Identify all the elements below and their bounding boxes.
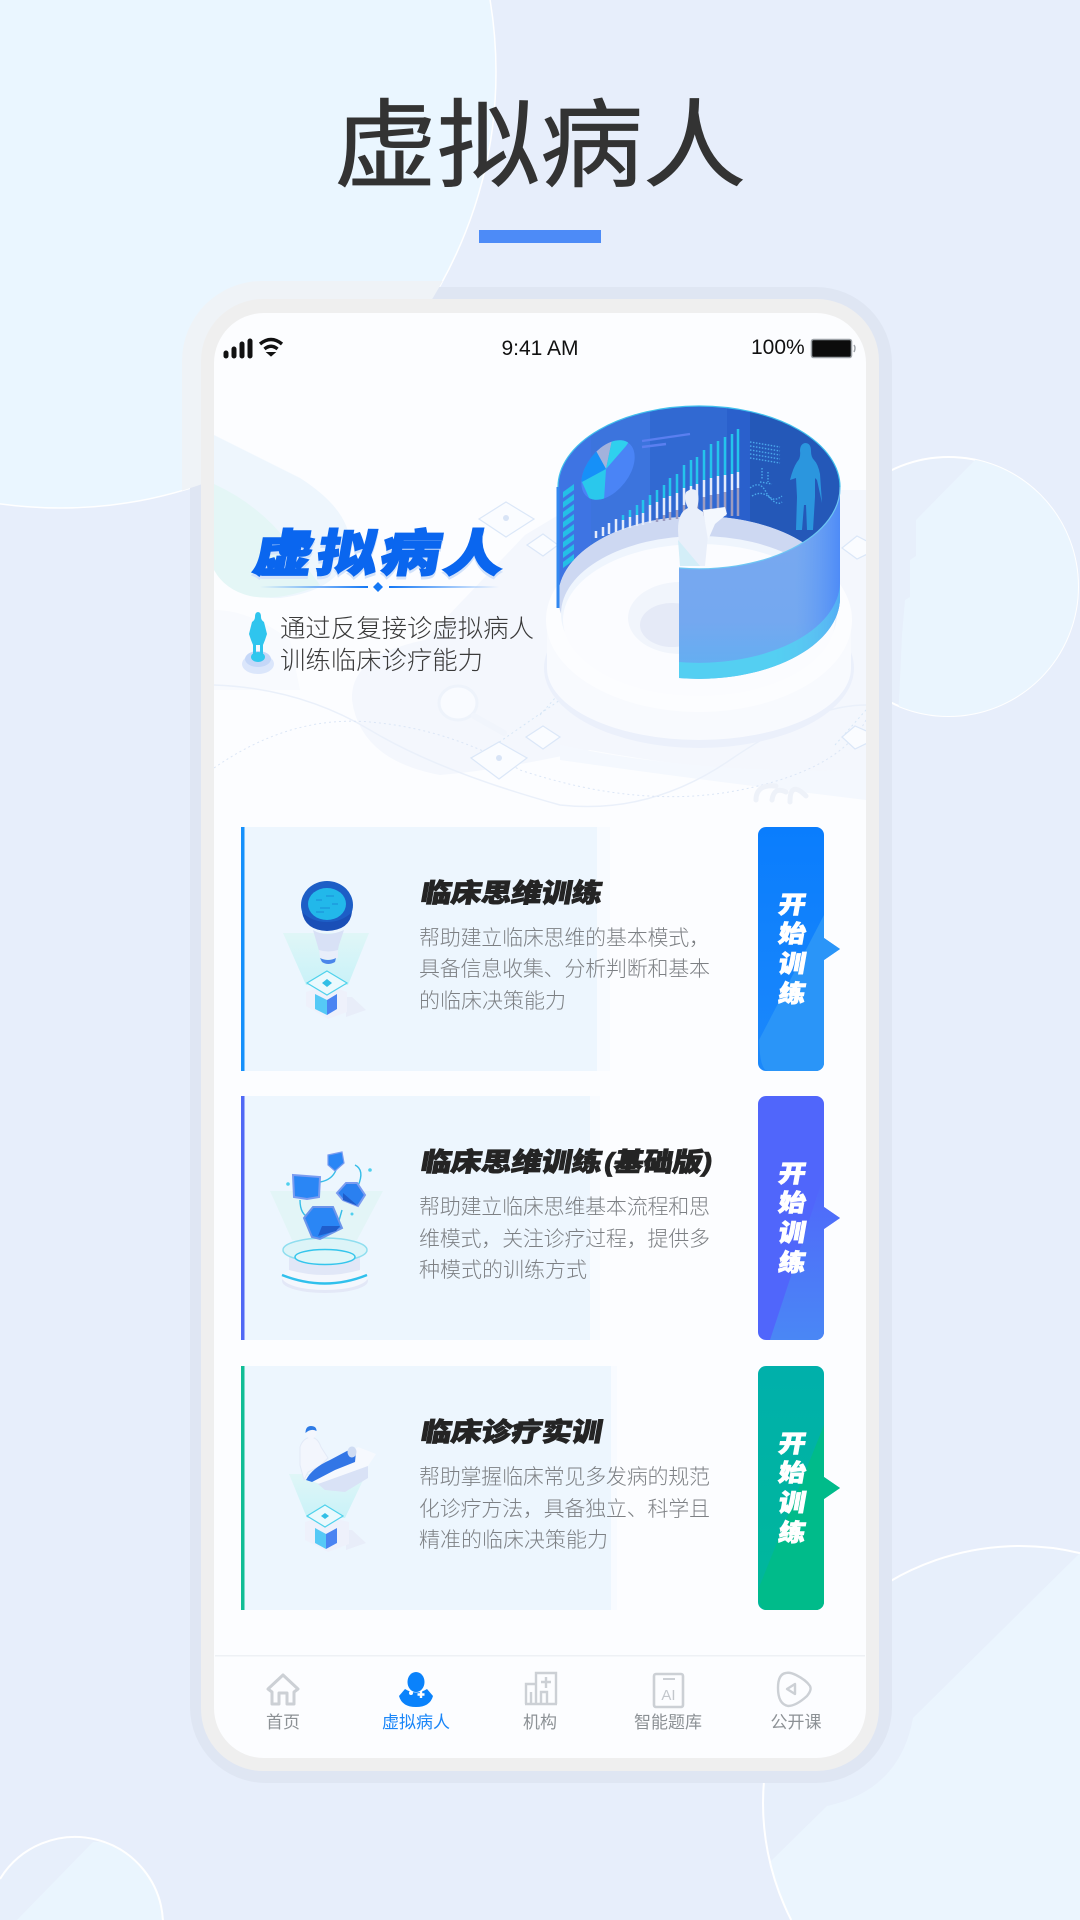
card title: 临床诊疗实训	[419, 1417, 605, 1447]
nav item: question bank: AI	[661, 1687, 676, 1704]
wifi decoration	[756, 786, 806, 802]
page title: 虚拟病人	[334, 93, 746, 200]
phone screen	[214, 313, 866, 1758]
card 1: clinical thinking training	[241, 827, 840, 1071]
icon: wifi	[260, 340, 282, 356]
card description: 的临床决策能力	[419, 990, 566, 1013]
title accent bar	[479, 230, 601, 243]
icon: brain bulb	[283, 881, 369, 1019]
card title: 临床思维训练	[419, 878, 605, 908]
isometric chips	[471, 502, 880, 779]
pie chart	[582, 440, 635, 500]
card description	[419, 927, 710, 1013]
phone mockup	[182, 281, 892, 1783]
3D platform	[544, 516, 854, 748]
card description: 帮助建立临床思维基本流程和思	[419, 1196, 710, 1219]
nav item: home: 首页	[266, 1713, 300, 1732]
doctor silhouette	[678, 489, 727, 566]
curved back screen	[558, 400, 840, 620]
hero heading: 虚拟病人	[249, 526, 513, 582]
clock: 9:41 AM	[501, 337, 579, 360]
card 3: clinical diagnosis and treatment practice	[241, 1366, 840, 1610]
front glass panel	[679, 487, 840, 679]
nav item: institutions: 机构	[523, 1713, 557, 1732]
nav item: question bank: 智能题库	[634, 1713, 702, 1732]
status bar	[226, 336, 855, 360]
background circle: bottom right	[760, 1546, 1080, 1920]
start button: 始	[777, 1189, 809, 1217]
card title	[419, 1147, 715, 1177]
hero banner	[214, 400, 880, 807]
start button: 开	[777, 1161, 808, 1188]
data text on screen	[750, 442, 782, 503]
card description: 具备信息收集、分析判断和基本	[419, 958, 710, 981]
card title: (基础版)	[602, 1148, 715, 1177]
start button: 开	[777, 892, 808, 919]
nav item: virtual patient active	[382, 1672, 450, 1732]
hero description: 通过反复接诊虚拟病人	[280, 615, 534, 643]
battery percent: 100%	[751, 336, 805, 359]
left cyan stripes	[563, 484, 574, 568]
hero description	[280, 615, 534, 675]
phone frame	[201, 299, 879, 1771]
nav item: question bank	[634, 1674, 702, 1732]
start button: 训	[777, 1489, 808, 1517]
card description: 精准的临床决策能力	[419, 1529, 608, 1552]
start button	[758, 827, 840, 1071]
background circle: bottom left	[0, 1837, 170, 1920]
start button: 练	[777, 1249, 809, 1277]
start button: 练	[777, 1519, 809, 1547]
card 2: clinical thinking basic edition	[241, 1096, 840, 1340]
start button: 开	[777, 1431, 808, 1458]
card description	[419, 1466, 710, 1552]
card background	[241, 1366, 617, 1610]
nav item: institutions	[523, 1673, 557, 1732]
card background	[241, 1096, 600, 1340]
card description: 化诊疗方法，具备独立、科学且	[419, 1498, 710, 1521]
card background	[241, 827, 610, 1071]
bar chart on screen	[596, 429, 738, 538]
background circle: top left	[0, 0, 496, 508]
hero divider	[260, 582, 499, 592]
hero heading: 虚拟病人	[249, 529, 513, 585]
start button: 训	[777, 1219, 808, 1247]
heading lines on screen	[642, 434, 690, 447]
start button: 始	[777, 1459, 809, 1487]
nav item: open courses	[770, 1673, 822, 1732]
phone drop shadow	[182, 281, 892, 1783]
nav item: open courses: 公开课	[770, 1713, 822, 1732]
hero flow lines	[214, 670, 866, 807]
background circle: right	[892, 456, 1079, 717]
icon: battery	[812, 340, 855, 358]
magnifier decoration	[439, 686, 504, 733]
bottom navigation	[215, 1655, 865, 1732]
card description: 帮助掌握临床常见多发病的规范	[419, 1466, 710, 1489]
hero background blobs	[214, 435, 866, 800]
icon: patient on scanner	[242, 612, 274, 674]
card description	[419, 1196, 710, 1282]
card description: 种模式的训练方式	[419, 1259, 587, 1282]
start button: 训	[777, 950, 808, 978]
card description: 维模式，关注诊疗过程，提供多	[419, 1228, 710, 1251]
nav item: virtual patient active: 虚拟病人	[382, 1713, 450, 1732]
start button: 练	[777, 980, 809, 1008]
card title: 临床思维训练	[419, 1147, 605, 1177]
hero description: 训练临床诊疗能力	[280, 647, 483, 675]
icon: cellular signal	[226, 341, 250, 356]
human body figure	[790, 443, 822, 530]
start button	[758, 1096, 840, 1340]
start button	[758, 1366, 840, 1610]
start button: 始	[777, 920, 809, 948]
nav item: home	[266, 1675, 300, 1732]
card description: 帮助建立临床思维的基本模式，	[419, 927, 710, 950]
icon: floating cubes on platform	[270, 1152, 383, 1293]
rim highlight	[558, 406, 840, 487]
icon: doctor and patient	[289, 1426, 376, 1552]
